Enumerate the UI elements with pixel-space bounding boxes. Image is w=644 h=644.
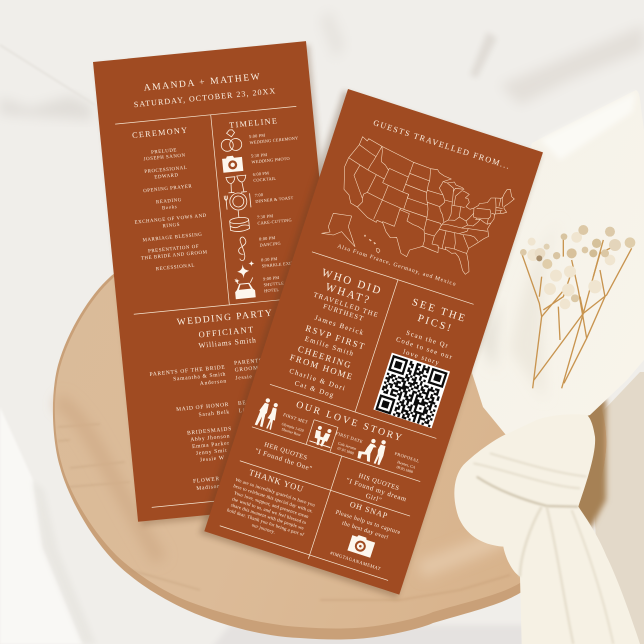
map of the USA <box>322 137 514 274</box>
parents of the bride: Anderson <box>200 378 227 387</box>
card 2 shadow <box>199 91 541 598</box>
board surface <box>55 225 606 628</box>
icon: shuttle car <box>234 277 256 299</box>
icon: camera <box>222 155 243 173</box>
flower girl: Madison Ford <box>196 482 236 492</box>
first date text <box>331 431 364 457</box>
ceremony order list: EXCHANGE OF VOWS AND <box>134 214 207 226</box>
panel: thank you <box>223 464 321 545</box>
timeline schedule text: 6:00 PM <box>252 170 269 177</box>
love story heading: OUR LOVE STORY <box>295 399 405 444</box>
icon: wedding rings <box>220 129 242 152</box>
panel: wedding party <box>144 308 300 495</box>
Alaska outline <box>322 213 355 247</box>
ceremony order list: RINGS <box>162 223 180 229</box>
ceremony order list: THE BRIDE AND GROOM <box>141 250 208 262</box>
first met text: Olympia 1-020 <box>281 422 304 433</box>
who did what heading <box>316 267 384 310</box>
parents of the groom: PARENTS OF THE <box>234 355 288 367</box>
officiant <box>197 324 257 350</box>
napkin shading <box>478 92 636 400</box>
map caption: Also From France, Germany, and Mexico <box>337 244 457 288</box>
ceremony order list: PRELUDE <box>151 148 177 156</box>
icon: cake <box>229 210 250 232</box>
best man <box>238 398 272 414</box>
timeline schedule text: SPARKLE EXIT <box>261 260 294 268</box>
see the pics heading: PICS! <box>416 313 454 335</box>
bridesmaids: Jenny Smit <box>196 448 228 457</box>
ceremony order list: EDWARD <box>154 173 179 181</box>
panel: our love story <box>255 389 426 476</box>
parents of the bride <box>149 365 227 392</box>
card 1 shadow <box>96 45 354 525</box>
first date text: 07.07.1888 <box>337 446 354 456</box>
oh snap heading: OH SNAP <box>349 500 389 520</box>
napkin knot <box>454 414 640 644</box>
first met text: Shooter Row <box>281 427 301 437</box>
hashtag: #IMGTAGANAMEMAT <box>329 551 381 572</box>
wood grain <box>58 424 510 600</box>
thank you message: the world to us, and we feel blessed to <box>231 497 307 526</box>
rsvp first: RSVP FIRST <box>304 323 367 352</box>
officiant: OFFICIANT <box>198 324 255 339</box>
timeline schedule text: SHUTTLE <box>263 280 284 287</box>
Hawaii islands <box>364 235 380 253</box>
oh snap message: the best day ever! <box>341 521 389 541</box>
icon: music notes <box>237 237 248 261</box>
icon: camera <box>347 533 376 558</box>
cheering from home: Charlie & Dori <box>288 367 347 393</box>
timeline schedule text: DINNER & TOAST <box>255 195 294 204</box>
timeline schedule text: COCKTAIL <box>253 176 277 183</box>
eastern state borders <box>439 197 503 253</box>
first date text: Cafe Jerome <box>337 441 357 451</box>
who did what heading: WHO DID <box>320 267 384 298</box>
maid of honor: Sarah Belk <box>198 409 230 418</box>
proposal text: Haynes, CA <box>396 460 416 471</box>
wedding party heading: WEDDING PARTY <box>176 309 274 328</box>
panel: his quotes <box>342 469 410 512</box>
flower stems <box>522 237 632 388</box>
ceremony order list: Books <box>162 205 177 211</box>
proposal text <box>390 451 420 475</box>
thank you message: hold dear. Thank you for being a part of <box>226 508 305 538</box>
thank you message: our journey. <box>251 523 276 536</box>
travelled the furthest: James Berick <box>314 314 365 337</box>
icon: cocktail glasses <box>226 175 247 194</box>
ceremony order list: OPENING PRAYER <box>143 184 193 194</box>
thank you message: share this moment with the people we <box>230 503 304 532</box>
travelled the furthest <box>306 292 380 340</box>
timeline schedule text <box>249 129 313 293</box>
cheering from home: Cat & Dog <box>294 379 336 400</box>
ceremony heading: CEREMONY <box>132 126 189 140</box>
ceremony order list: PRESENTATION OF <box>148 245 199 255</box>
card 1 background <box>93 41 351 522</box>
travelled the furthest: TRAVELLED THE <box>312 292 380 319</box>
parents of the groom: GROOM <box>235 365 259 374</box>
maid of honor: MAID OF HONOR <box>176 402 229 413</box>
background: beige linen right <box>592 372 644 644</box>
timeline schedule text: WEDDING CEREMONY <box>249 135 299 145</box>
program card 1 (back): ceremony, timeline, wedding party <box>93 41 354 526</box>
timeline schedule text: CAKE-CUTTING <box>257 217 292 226</box>
first met text: FIRST MET <box>283 412 309 425</box>
scan instructions: Scan the Qr <box>405 330 450 350</box>
see the pics heading: SEE THE <box>411 297 468 325</box>
flower blossoms <box>520 225 635 309</box>
panel: his quotes: Girl" <box>365 493 383 504</box>
scan instructions: love story <box>402 349 441 367</box>
icon: couple silhouette <box>255 397 281 430</box>
background: grey surface under board <box>210 625 530 644</box>
QR code <box>373 353 450 428</box>
section dividers <box>218 251 479 585</box>
timeline schedule text: WEDDING PHOTO <box>251 156 290 164</box>
card 2 background <box>204 89 543 595</box>
see the pics heading <box>406 297 468 338</box>
bridesmaids: BRIDESMAIDS <box>187 426 232 437</box>
timeline heading: TIMELINE <box>229 116 279 130</box>
cheering from home: FROM HOME <box>289 352 355 382</box>
parents of the groom <box>234 355 290 382</box>
timeline schedule text: 7:00 <box>255 192 263 198</box>
best man: Liam Scott <box>239 405 270 414</box>
timeline schedule text: DANCING <box>259 241 281 248</box>
knot folds <box>473 453 613 644</box>
dried flowers bouquet <box>520 225 635 388</box>
parents of the groom: Jessie Anderson <box>235 371 281 382</box>
officiant: Williams Smith <box>198 335 257 350</box>
icon: dinner plate <box>224 192 251 211</box>
thank you message <box>223 478 316 545</box>
scan instructions: Code to see our <box>395 336 454 361</box>
icon: proposal silhouette <box>356 434 388 465</box>
ceremony order list: JOSEPH SANON <box>144 153 186 163</box>
bridesmaids: Abby Jhonson <box>190 433 230 443</box>
maid of honor <box>176 402 230 420</box>
panel: who did what <box>282 265 388 405</box>
proposal text: 09.05.1888 <box>396 465 413 474</box>
timeline schedule text: 8:00 PM <box>259 235 276 242</box>
bridesmaids: Jessie W <box>200 455 225 463</box>
oh snap message: Please help us to capture <box>335 510 401 536</box>
white napkin petal <box>472 90 644 440</box>
icon: first date dinner silhouette <box>309 424 336 449</box>
knot base shape <box>454 414 640 644</box>
timeline schedule text: 7:30 PM <box>257 213 273 220</box>
panel: her quotes: HER QUOTES <box>263 441 309 462</box>
first date text: FIRST DATE <box>335 431 364 444</box>
ceremony order list: PROCESSIONAL <box>144 166 188 175</box>
icon: sparkles <box>233 260 256 284</box>
midwestern state borders <box>427 182 474 226</box>
timeline schedule text: HOTEL <box>264 287 280 293</box>
flower girl: FLOWER GIRL <box>193 474 238 485</box>
first met text <box>278 412 309 438</box>
date heading: SATURDAY, OCTOBER 23, 20XX <box>133 86 277 109</box>
thank you message: We are so incredibly grateful to have you <box>235 478 316 509</box>
parents of the bride: PARENTS OF THE BRIDE <box>149 365 226 378</box>
panel: his quotes: "I Found my dream <box>345 477 408 504</box>
thank you message: here to celebrate this special day with us. <box>233 484 313 515</box>
timeline schedule text: 5:00 PM <box>249 133 266 139</box>
thank you heading: THANK YOU <box>248 467 305 494</box>
flower girl <box>193 474 239 492</box>
timeline schedule text: 5:30 PM <box>251 152 267 159</box>
column dividers <box>114 106 334 507</box>
proposal text: PROPOSAL <box>394 451 420 464</box>
cheering from home <box>282 342 358 403</box>
panel: oh snap <box>322 496 406 575</box>
timeline schedule text: 9:00 PM <box>263 275 279 281</box>
western state borders <box>349 145 427 219</box>
panel: timeline <box>217 114 313 299</box>
ceremony order list <box>128 146 212 274</box>
program card 2 (front): map, who did what, love story <box>199 88 543 598</box>
background: lower-left white cloth <box>0 407 96 644</box>
panel: his quotes: HIS QUOTES <box>358 472 400 492</box>
panel: ceremony <box>126 125 212 274</box>
thank you message: Your love, support, and presence mean <box>233 491 310 520</box>
ceremony order list: READING <box>156 198 182 206</box>
bridesmaids <box>187 426 235 464</box>
bridesmaids: Emma Parker <box>192 440 230 450</box>
ceremony order list: RECESSIONAL <box>156 264 195 272</box>
map heading: GUESTS TRAVELLED FROM... <box>372 118 512 171</box>
who did what heading: WHAT? <box>324 281 372 307</box>
parents of the bride: Samantha & Smith <box>173 372 226 383</box>
scan instructions <box>392 327 457 370</box>
rsvp first: Emilie Smith <box>304 335 355 358</box>
travelled the furthest: FURTHEST <box>322 303 365 323</box>
timeline schedule text: 8:30 PM <box>261 256 278 263</box>
board rim <box>53 225 606 640</box>
wooden round board <box>53 225 606 640</box>
panel: see the pics <box>373 296 468 428</box>
USA outline <box>344 137 514 274</box>
central state borders <box>383 162 441 248</box>
ceremony order list: MARRIAGE BLESSING <box>142 233 203 243</box>
panel: her quotes: "I Found the One" <box>254 448 313 473</box>
names heading: AMANDA + MATHEW <box>143 72 262 94</box>
best man: BEST MAN <box>238 398 271 407</box>
cheering from home: CHEERING <box>297 344 353 371</box>
